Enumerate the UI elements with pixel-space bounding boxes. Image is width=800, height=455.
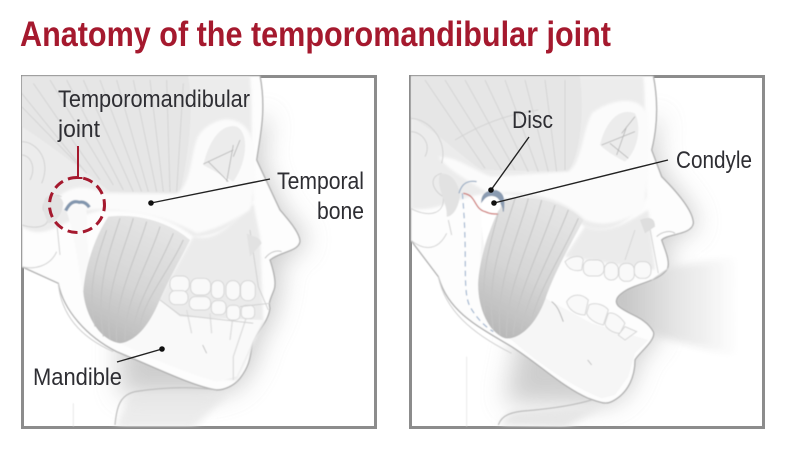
skull shading (411, 77, 647, 229)
label: temporal bone (277, 168, 364, 225)
label: temporomandibular joint: Temporomandibular (58, 86, 250, 113)
ear (411, 118, 452, 248)
joint highlight circle (46, 174, 108, 236)
mandible (550, 301, 592, 366)
illustration: open jaw skull (411, 76, 738, 428)
face base (411, 76, 693, 403)
panel: open jaw (410, 76, 764, 428)
masseter muscle (83, 216, 190, 343)
disc pointer (488, 137, 529, 193)
red ligament (463, 193, 498, 214)
eye socket (203, 126, 245, 182)
label: disc: Disc (512, 107, 553, 134)
teeth (169, 276, 255, 320)
temporalis muscle (412, 77, 566, 172)
lower teeth (567, 295, 637, 340)
title: Anatomy of the temporomandibular joint (20, 15, 611, 54)
upper teeth (565, 256, 651, 281)
mandible pointer (117, 346, 165, 362)
temporalis muscle (22, 77, 191, 193)
joint disc (66, 202, 89, 211)
masseter muscle (478, 197, 583, 338)
skull shading (160, 206, 264, 380)
label: temporal bone: bone (317, 198, 364, 225)
label: mandible: Mandible (33, 364, 122, 391)
panel: closed jaw: joint (57, 116, 100, 143)
ligament outlines (459, 181, 477, 193)
illustration: closed jaw skull (22, 76, 307, 428)
label: condyle: Condyle (676, 147, 752, 174)
displaced disc (482, 191, 504, 212)
label: temporal bone: Temporal (277, 168, 364, 195)
condyle pointer (491, 160, 668, 206)
cheekbone arch (438, 101, 648, 224)
dashed jaw path (462, 193, 493, 332)
ear (22, 142, 62, 268)
panel: closed jaw (22, 76, 375, 428)
temporal bone pointer (148, 179, 270, 206)
eye socket (600, 112, 638, 162)
white condyle neck (482, 204, 495, 242)
joint pointer (74, 146, 82, 178)
face base (22, 76, 300, 390)
mandible (67, 205, 263, 382)
cheekbone arch (52, 119, 255, 233)
